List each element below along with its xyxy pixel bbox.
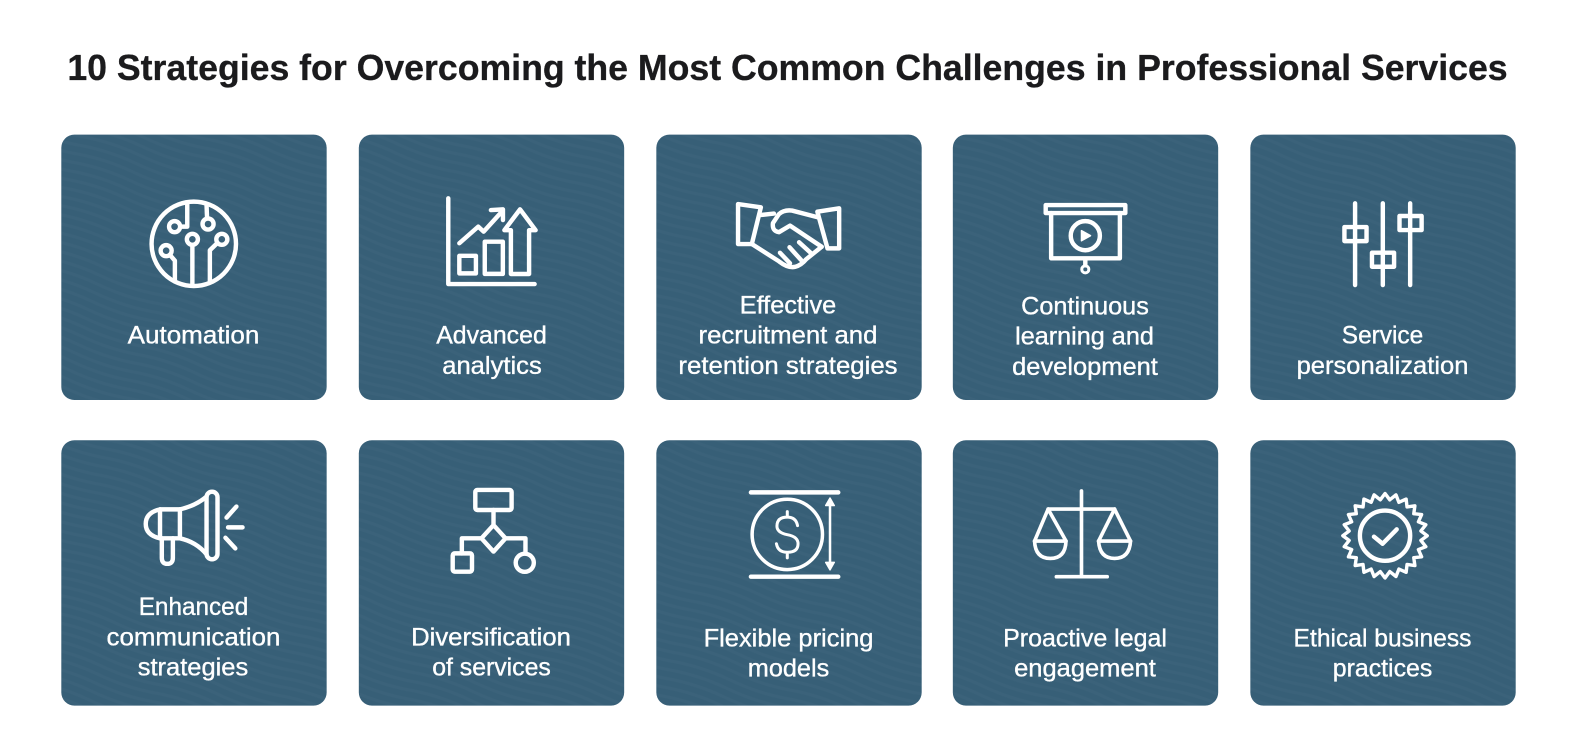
- icon: presentation screen: [1046, 205, 1125, 273]
- panel: Enhanced communication strategies: [61, 440, 327, 706]
- label: personalization: [1297, 352, 1468, 380]
- panel: Diversification of services: [359, 440, 624, 706]
- panel: Effective recruitment and retention strategies: [656, 135, 922, 400]
- label: engagement: [1014, 654, 1156, 682]
- icon: sliders: [1344, 203, 1422, 285]
- label: [107, 593, 280, 681]
- icon: certified badge: [1343, 493, 1427, 578]
- label: learning and: [1015, 323, 1154, 351]
- panel: Automation: [61, 135, 327, 400]
- title: 10 Strategies for Overcoming the Most Common Challenges in Professional Services: [67, 47, 1508, 88]
- label: [411, 623, 571, 681]
- label: retention strategies: [678, 352, 898, 380]
- label: communication: [107, 623, 280, 651]
- label: strategies: [138, 653, 248, 681]
- label: practices: [1333, 654, 1432, 682]
- label: [1003, 624, 1167, 682]
- label: of services: [432, 653, 551, 681]
- label: [704, 624, 873, 682]
- label: [1012, 293, 1158, 381]
- panel: Ethical business practices: [1250, 440, 1516, 706]
- label: Enhanced: [139, 593, 248, 621]
- label: Advanced: [436, 322, 547, 350]
- icon: megaphone: [146, 492, 243, 564]
- label: Service: [1342, 322, 1423, 350]
- label: [1297, 322, 1468, 380]
- label: models: [748, 654, 829, 682]
- panel: Proactive legal engagement: [953, 440, 1218, 706]
- label: [436, 322, 547, 380]
- label: Diversification: [411, 623, 571, 651]
- label: Ethical business: [1294, 624, 1471, 652]
- label: Proactive legal: [1003, 624, 1167, 652]
- label: recruitment and: [699, 322, 877, 350]
- label: [678, 292, 898, 380]
- label: Continuous: [1021, 293, 1149, 321]
- label: Automation: [128, 322, 259, 350]
- icon: dollar price range: [751, 492, 838, 577]
- label: Effective: [740, 292, 836, 320]
- panel: Continuous learning and development: [953, 135, 1218, 400]
- panel: Flexible pricing models: [656, 440, 922, 706]
- icon: growth chart: [448, 198, 536, 284]
- icon: circuit globe: [152, 202, 236, 286]
- icon: balance scales: [1035, 491, 1131, 577]
- label: analytics: [442, 352, 542, 380]
- label: [1294, 624, 1471, 682]
- icon: flowchart: [453, 490, 534, 572]
- panel: Advanced analytics: [359, 135, 624, 400]
- panel: Service personalization: [1250, 135, 1516, 400]
- label: Flexible pricing: [704, 624, 873, 652]
- label: development: [1012, 353, 1158, 381]
- icon: handshake: [738, 204, 839, 267]
